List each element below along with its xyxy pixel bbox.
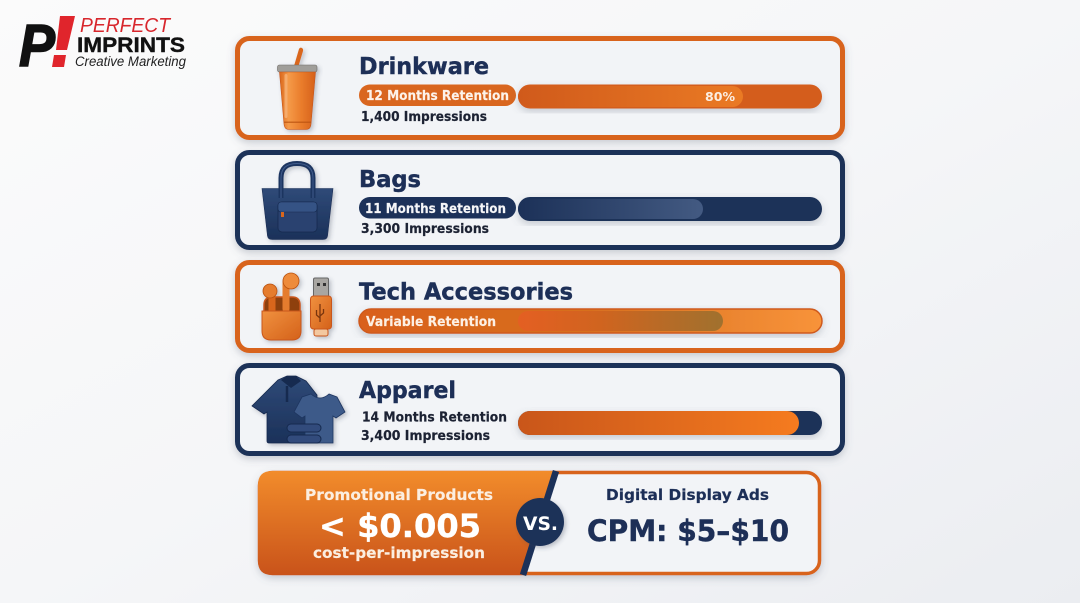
progress bar: variable retention: Variable Retention	[366, 315, 496, 330]
panel: Bags	[238, 152, 842, 248]
logo: Perfect Imprints Creative Marketing: Creative Marketing	[75, 54, 186, 69]
panel side: digital display ads: CPM: $5–$10	[587, 514, 789, 548]
panel: Tech Accessories	[238, 262, 842, 350]
divider line	[523, 471, 556, 575]
pill: 12 months retention	[359, 84, 516, 106]
heading: Drinkware: Drinkware	[359, 54, 489, 80]
badge: VS.: VS.	[523, 513, 558, 535]
panel side: promotional products: < $0.005	[319, 507, 481, 545]
progress bar: 80%	[518, 84, 822, 108]
pill: 12 months retention: 12 Months Retention	[366, 89, 509, 104]
icon: tumbler with straw	[278, 48, 317, 129]
text: 3,300 impressions: 3,300 Impressions	[361, 222, 489, 237]
icon: earbuds case and USB drive	[262, 273, 332, 340]
text: 14 months retention: 14 Months Retention	[362, 410, 507, 426]
badge: VS.	[516, 498, 564, 546]
panel side: digital display ads	[587, 486, 789, 548]
progress bar: apparel	[518, 411, 822, 435]
logo: Perfect Imprints Creative Marketing: P	[19, 13, 56, 79]
panel: Drinkware	[238, 38, 842, 138]
icon: polo shirt, t-shirt and folded stack	[252, 376, 345, 443]
pill: 11 months retention: 11 Months Retention	[365, 202, 506, 217]
logo: Perfect Imprints Creative Marketing: PERFECT	[80, 15, 172, 37]
panel side: digital display ads: Digital Display Ads	[606, 486, 769, 504]
pill: 11 months retention	[359, 197, 516, 218]
logo: Perfect Imprints Creative Marketing	[19, 13, 186, 79]
heading: Bags: Bags	[359, 167, 421, 193]
panel side: promotional products: cost-per-impression	[313, 544, 485, 562]
panel side: promotional products: Promotional Products	[305, 486, 493, 504]
heading: Tech Accessories: Tech Accessories	[359, 280, 573, 306]
progress bar: bags	[518, 197, 822, 221]
panel: cost comparison	[258, 471, 820, 575]
progress bar: 80%: 80%	[705, 89, 735, 104]
heading: Apparel: Apparel	[359, 378, 456, 404]
text: 3,400 impressions: 3,400 Impressions	[361, 429, 490, 444]
panel: Apparel	[238, 366, 842, 454]
panel side: promotional products	[258, 471, 556, 575]
progress bar: variable retention	[359, 309, 822, 333]
icon: tote bag	[262, 164, 333, 240]
logo: Perfect Imprints Creative Marketing: IMPRINTS	[77, 34, 185, 57]
text: 1,400 impressions: 1,400 Impressions	[361, 110, 487, 125]
